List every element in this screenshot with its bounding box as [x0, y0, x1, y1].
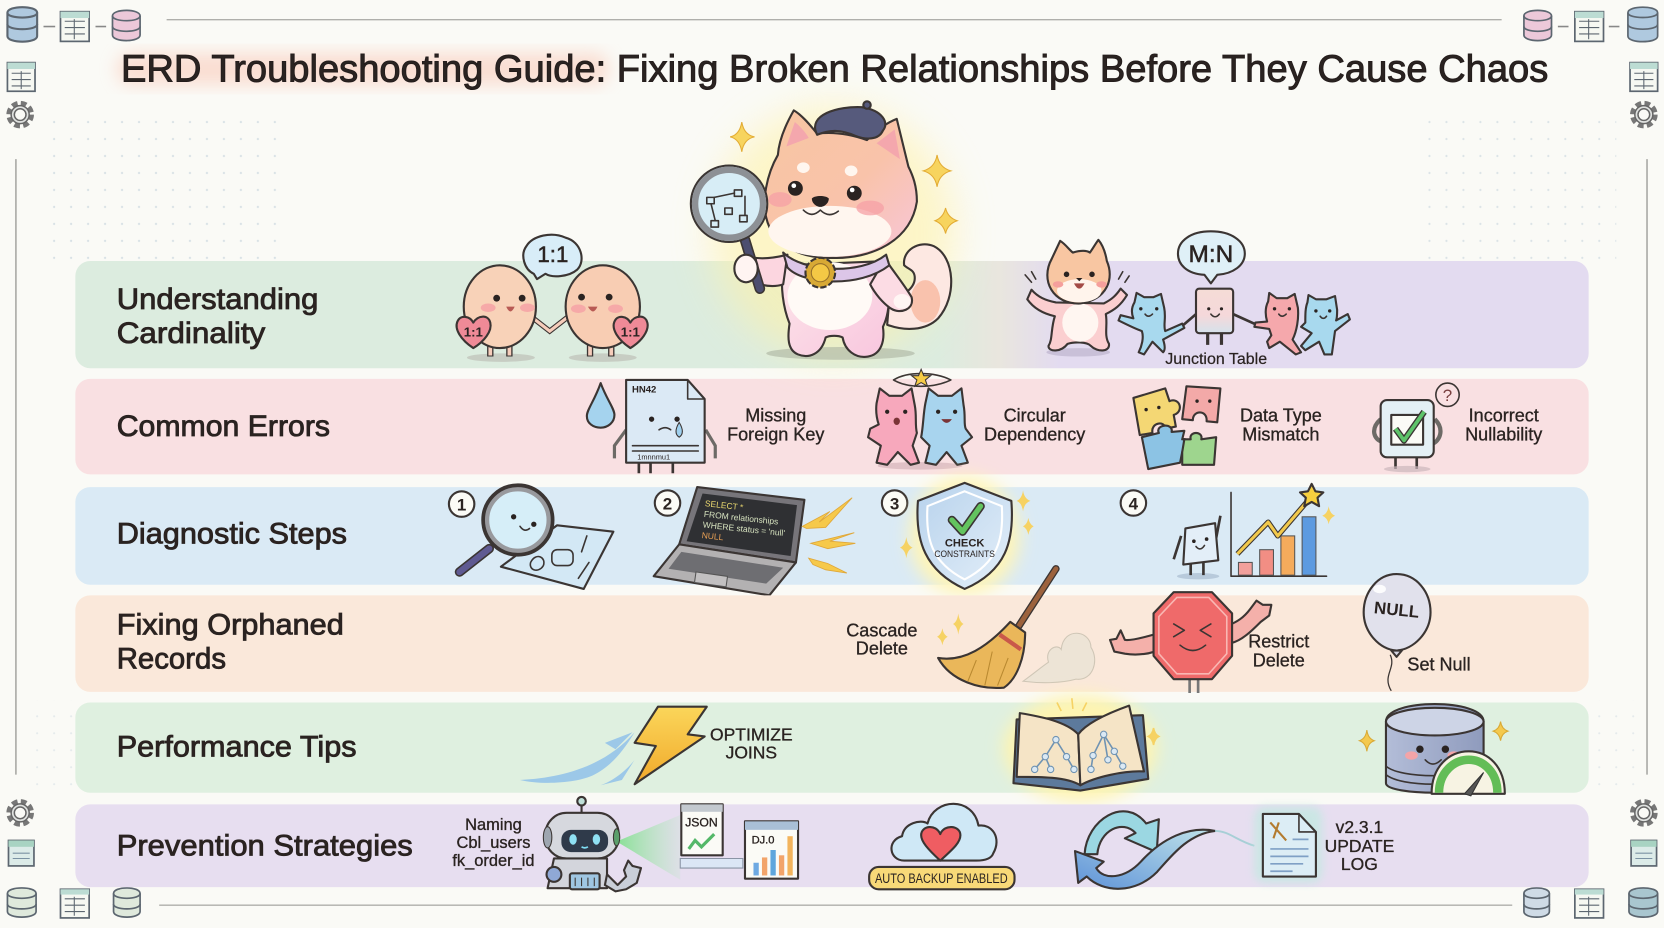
- corner icons: top right: [1524, 7, 1658, 125]
- label: v2.3.1: [1336, 817, 1383, 837]
- label: naming conventions: fk_order_id: [452, 852, 535, 870]
- icon: gear: [1633, 802, 1654, 823]
- icon: table below: [1630, 63, 1658, 91]
- blue cat: [1119, 293, 1184, 354]
- heading: Performance Tips: [117, 731, 357, 764]
- bubble M:N: [1178, 231, 1245, 283]
- heart right: [614, 317, 648, 348]
- band: [75, 702, 1589, 793]
- icon: water drop: [587, 383, 614, 428]
- icon: json document: [680, 804, 743, 868]
- icon: robot: [543, 797, 641, 891]
- step 2: SELECT *: [704, 498, 744, 512]
- icon: many-to-many group: M:N: [1188, 241, 1233, 268]
- step 3: [882, 476, 1034, 595]
- heading: Records: [117, 643, 226, 676]
- icon: lightning bolt: [635, 707, 707, 784]
- label: Cascade: [846, 621, 917, 641]
- heading: Prevention Strategies: [117, 829, 413, 862]
- panel: diagnostic steps: [75, 476, 1589, 595]
- icon: sad document: [614, 380, 715, 473]
- gauge: [1432, 751, 1505, 794]
- label: Restrict: [1248, 631, 1309, 651]
- icon: database: [7, 888, 36, 917]
- sparkles around mascot: [730, 122, 957, 233]
- label: JOINS: [726, 743, 777, 763]
- icon: speed lines: [520, 732, 635, 785]
- question bubble: ?: [1443, 386, 1452, 405]
- icon: table below: [7, 63, 35, 91]
- step 3: CHECK: [945, 538, 984, 550]
- icon: database: [1524, 888, 1549, 917]
- panel: performance tips: [75, 695, 1589, 801]
- heading: Cardinality: [117, 317, 265, 350]
- eyes: [788, 181, 803, 196]
- heading: Common Errors: [117, 410, 330, 443]
- icon: glowing book: [1004, 695, 1159, 801]
- icon: table small: [1631, 840, 1657, 866]
- muzzle: [768, 206, 891, 257]
- title glow: [117, 53, 609, 85]
- inner ears: [786, 122, 809, 146]
- icon: stop sign: [1110, 592, 1271, 693]
- icon: sad document: HN42: [632, 385, 656, 396]
- band: [75, 804, 1589, 887]
- icon: table: [60, 12, 89, 41]
- dog: [1025, 240, 1129, 357]
- panel: fixing orphaned records: [75, 569, 1589, 693]
- heading: Fixing Orphaned: [117, 609, 344, 642]
- panel: common errors: [75, 369, 1589, 474]
- label: naming conventions: Cbl_users: [456, 834, 530, 852]
- icon: NULL balloon: NULL: [1373, 598, 1420, 622]
- label: Delete: [856, 639, 908, 659]
- label: UPDATE: [1325, 836, 1394, 856]
- mascot: detective shiba: [691, 101, 951, 360]
- icon: NULL balloon: [1364, 574, 1431, 691]
- connector: [1558, 26, 1568, 28]
- icon: table: [60, 889, 89, 918]
- heading: Diagnostic Steps: [117, 517, 347, 550]
- step 4: 4: [1129, 494, 1139, 513]
- step 3: CONSTRAINTS: [934, 549, 995, 559]
- label: Circular: [1004, 405, 1066, 425]
- icon: cloud heart: [891, 804, 997, 861]
- step 3: 3: [890, 494, 899, 513]
- icon: scanner beam: [617, 815, 680, 880]
- label: Set Null: [1407, 655, 1471, 675]
- icon: circular dependency cats: [868, 369, 972, 470]
- connector: [44, 26, 55, 28]
- label: Missing: [745, 405, 806, 425]
- label: Junction Table: [1165, 351, 1267, 368]
- icon: table: [1575, 889, 1604, 918]
- label: Data Type: [1240, 405, 1322, 425]
- corner icons: bottom left: [7, 802, 140, 918]
- band green to purple: [75, 261, 1589, 368]
- robot hand: [605, 861, 641, 891]
- icon: chart document: DJ.0: [752, 835, 774, 847]
- panel: understanding cardinality: [75, 231, 1589, 368]
- blue cat: [1301, 295, 1350, 354]
- step 1: 1: [457, 495, 466, 514]
- label: LOG: [1341, 854, 1378, 874]
- body and legs: [782, 261, 889, 357]
- brows: [797, 162, 810, 173]
- heart left: [457, 317, 491, 348]
- shadow: [766, 347, 915, 360]
- tail: [887, 244, 951, 329]
- head with ears: [765, 110, 917, 258]
- left arm: [756, 255, 787, 286]
- icon: gear: [10, 802, 31, 823]
- medal: [805, 258, 835, 288]
- icon: database pink: [1524, 10, 1552, 41]
- dot grid: top left: [49, 115, 289, 263]
- bubble 1:1: [523, 235, 582, 279]
- icon: chart document: [745, 821, 798, 879]
- icon: gear: [1633, 104, 1654, 125]
- left paw: [734, 255, 758, 282]
- icon: log document: [1254, 806, 1322, 883]
- icon: database: [114, 888, 140, 917]
- connector: [96, 26, 106, 28]
- corner icons: bottom right: [1524, 802, 1658, 918]
- step 2: [654, 487, 855, 595]
- beret: [815, 107, 885, 139]
- pink cat: [1254, 293, 1301, 354]
- nose and mouth: [812, 196, 829, 207]
- dot grid: bottom left: [32, 700, 85, 796]
- step 2: WHERE status = 'null': [702, 519, 786, 538]
- dust cloud: [1023, 633, 1095, 683]
- label: Delete: [1253, 650, 1305, 670]
- icon: database: [1629, 888, 1658, 917]
- label: Nullability: [1465, 424, 1542, 444]
- magnifying glass: [691, 166, 767, 289]
- band: [75, 379, 1589, 474]
- step 2: FROM relationships: [703, 509, 779, 527]
- title: ERD Troubleshooting Guide: Fixing Broken Relationships Before They Cause Chaos: [121, 48, 1548, 91]
- icon: gear: [10, 104, 31, 125]
- step 2: 2: [663, 494, 672, 513]
- label: OPTIMIZE: [710, 725, 793, 745]
- character: [1177, 573, 1219, 579]
- icon: one-to-one blobs: 1:1: [621, 324, 640, 339]
- dot grid: bottom right: [1590, 700, 1643, 796]
- badge: auto backup: [869, 867, 1015, 889]
- icon: table: [1575, 12, 1604, 41]
- step 4: [1121, 484, 1335, 579]
- icon: puzzle pieces: [1133, 386, 1220, 469]
- step 1: [449, 487, 613, 589]
- badge: auto backup: AUTO BACKUP ENABLED: [875, 871, 1008, 886]
- right arm: [870, 259, 912, 311]
- label: Incorrect: [1469, 405, 1539, 425]
- panel: prevention strategies: [75, 797, 1589, 891]
- small faces: [1139, 307, 1331, 318]
- connector: [1609, 26, 1619, 28]
- icon: one-to-one blobs: [457, 235, 648, 362]
- icon: broom: [937, 569, 1095, 688]
- icon: database with gauge: [1359, 704, 1508, 796]
- step 2: NULL: [701, 530, 724, 542]
- icon: many-to-many group: [1025, 231, 1350, 368]
- icon: json document: JSON: [685, 816, 718, 830]
- junction table character: [1181, 289, 1256, 345]
- label: Foreign Key: [727, 424, 824, 444]
- icon: one-to-one blobs: 1:1: [537, 242, 568, 267]
- heading: Understanding: [117, 283, 318, 316]
- dot grid: top right: [1427, 115, 1616, 263]
- label: Dependency: [984, 424, 1085, 444]
- icon: database blue: [7, 7, 37, 42]
- icon: table small: [8, 840, 34, 866]
- label: naming conventions: Naming: [465, 816, 522, 834]
- icon: nullability checklist: [1374, 383, 1459, 472]
- corner icons: top left: [7, 7, 140, 125]
- scarf: [783, 253, 889, 281]
- band: [75, 487, 1589, 585]
- icon: database pink: [112, 10, 140, 41]
- icon: sync arrows: [1075, 811, 1254, 889]
- label: Mismatch: [1242, 424, 1319, 444]
- mascot glow: [711, 106, 955, 357]
- icon: database blue: [1628, 7, 1658, 42]
- icon: one-to-one blobs: 1:1: [464, 324, 483, 339]
- chart: [1231, 492, 1327, 576]
- icon: sad document: 1mnnmu1: [637, 452, 670, 461]
- lightning: [802, 498, 855, 573]
- band: [75, 595, 1589, 692]
- cheeks: [768, 192, 792, 207]
